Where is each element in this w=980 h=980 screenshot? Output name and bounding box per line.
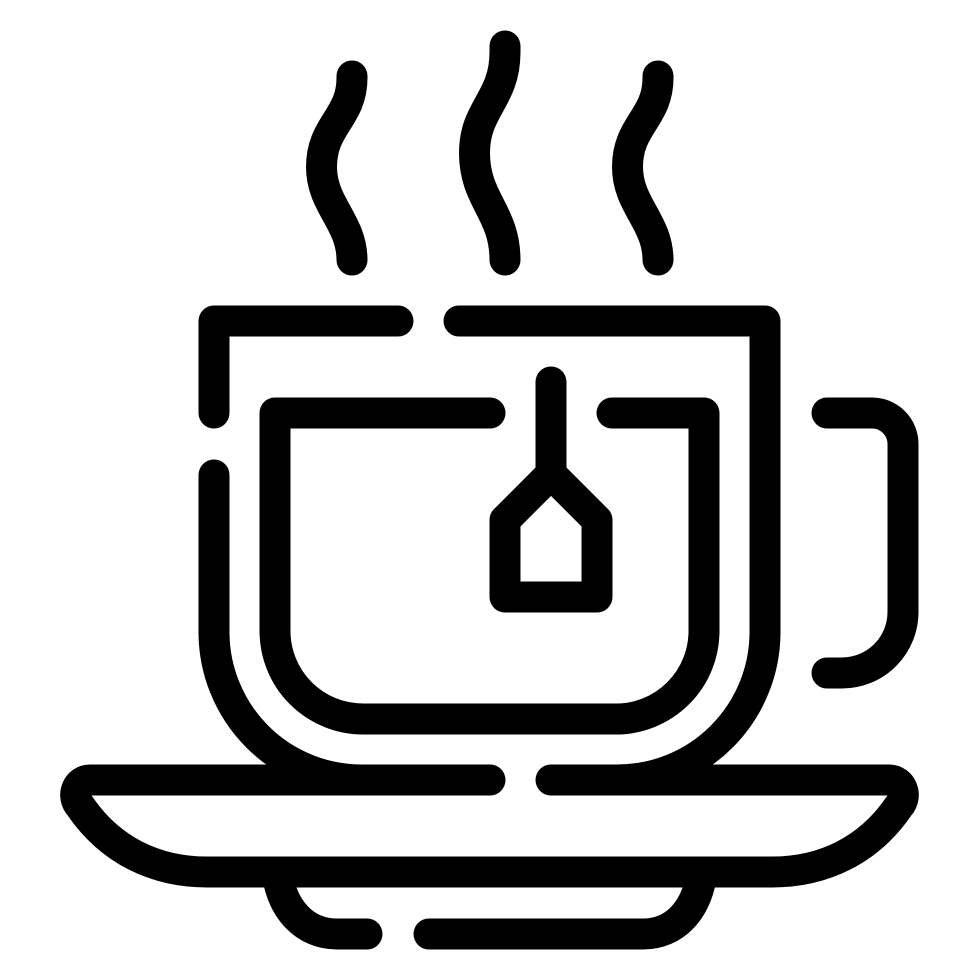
- icon: right steam: [628, 76, 658, 260]
- icon: inner cup: [275, 413, 704, 719]
- icon: saucer foot: [277, 872, 702, 934]
- icon: left steam: [322, 76, 352, 260]
- icon: tea bag: [505, 382, 597, 597]
- icon: saucer: [76, 780, 903, 872]
- icon: middle steam: [474, 46, 505, 260]
- icon: outer cup wall: [214, 321, 765, 780]
- icon: cup handle: [827, 413, 903, 673]
